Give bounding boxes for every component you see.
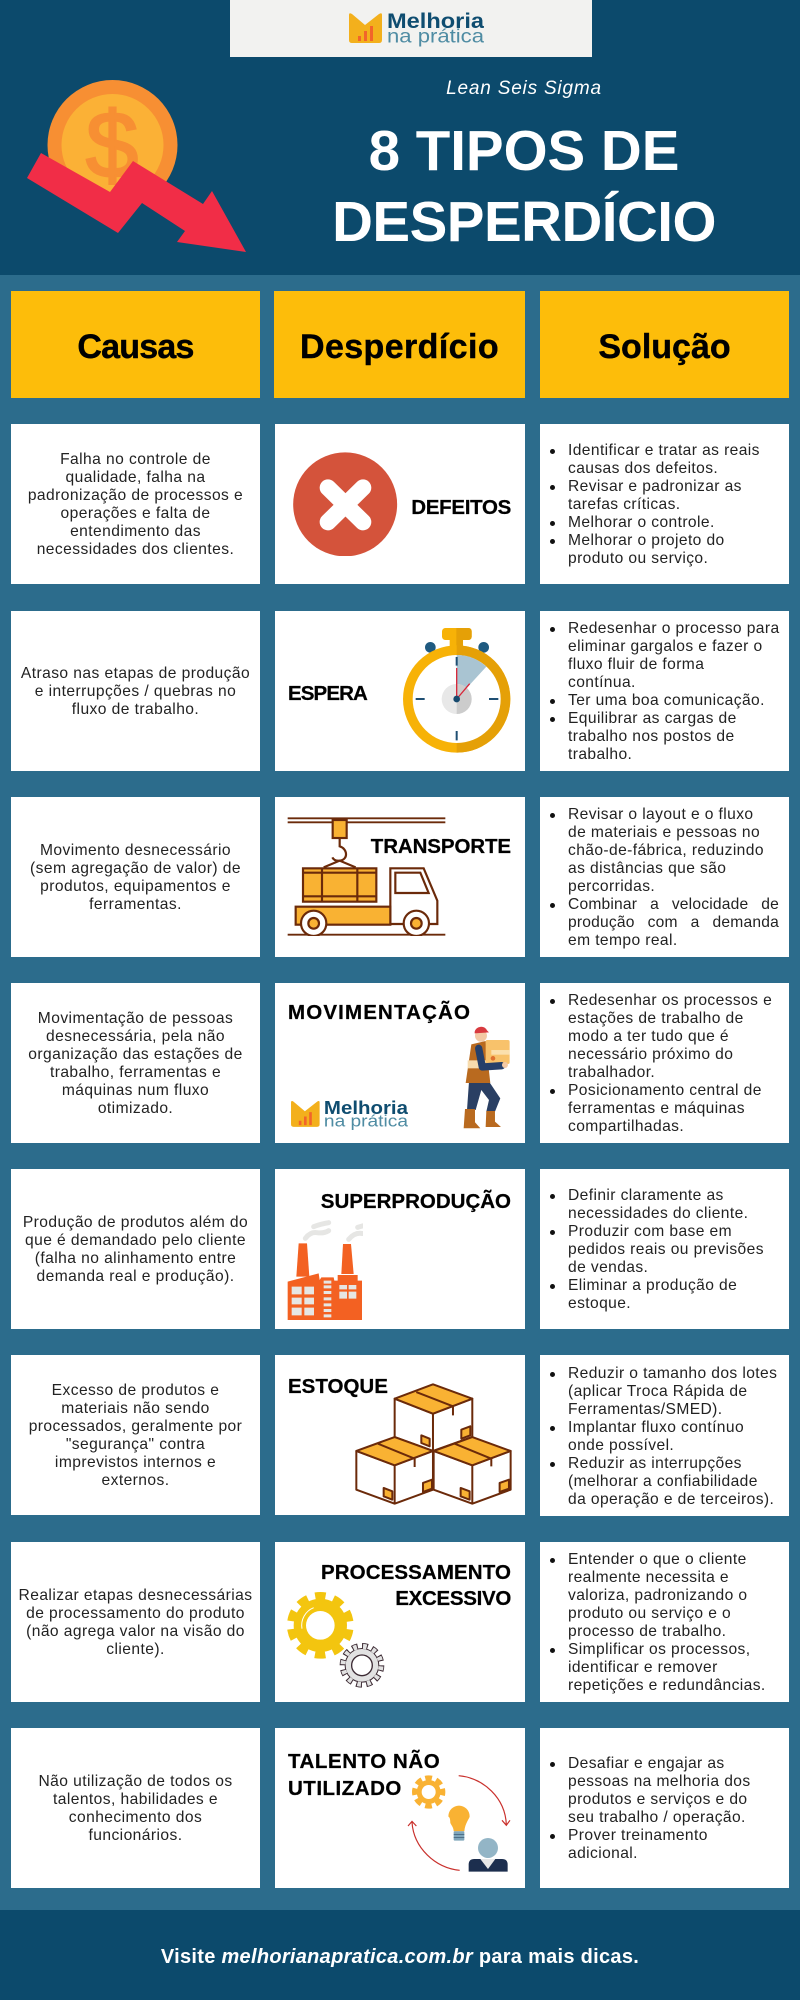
icon: factory xyxy=(288,1220,363,1320)
title: DESPERDÍCIO xyxy=(332,190,716,253)
solution 8: pessoas na melhoria dos xyxy=(568,1773,751,1790)
logo xyxy=(349,12,484,48)
cause 8: conhecimento dos xyxy=(69,1809,202,1826)
label: superprodução: SUPERPRODUÇÃO xyxy=(321,1190,511,1213)
cause 3: (sem agregação de valor) de xyxy=(30,860,241,877)
solution 2: Equilibrar as cargas de xyxy=(568,710,737,727)
solution 8: produtos e serviços e do xyxy=(568,1791,748,1808)
solution 3: percorridas. xyxy=(568,878,655,895)
solution 3: Combinar a velocidade de xyxy=(568,896,779,913)
cause 4 xyxy=(11,983,260,1143)
panel: transporte xyxy=(275,797,525,957)
cause 6 xyxy=(11,1355,260,1515)
cause 2: e interrupções / quebras no xyxy=(35,683,236,700)
cause 2 xyxy=(11,611,260,771)
solution 4: Posicionamento central de xyxy=(568,1082,762,1099)
cause 1: padronização de processos e xyxy=(28,487,243,504)
cause 7 xyxy=(11,1542,260,1702)
panel: defeitos xyxy=(275,424,525,584)
cause 4: desnecessária, pela não xyxy=(46,1028,225,1045)
solution 6: Reduzir o tamanho dos lotes xyxy=(568,1364,777,1382)
cause 8: funcionários. xyxy=(88,1827,182,1844)
solution 8: seu trabalho / operação. xyxy=(568,1809,746,1826)
cause 6: Excesso de produtos e xyxy=(52,1382,219,1399)
solution 7: produto ou serviço e o xyxy=(568,1605,731,1622)
logo xyxy=(291,1100,408,1130)
cause 6: imprevistos internos e xyxy=(55,1454,216,1471)
solution 2: trabalho. xyxy=(568,746,632,763)
solution 7 xyxy=(540,1542,789,1702)
label: estoque: ESTOQUE xyxy=(288,1375,388,1398)
panel: espera xyxy=(275,611,525,771)
solution 5: de vendas. xyxy=(568,1259,648,1276)
solution 4: Redesenhar os processos e xyxy=(568,992,772,1009)
icon: stacked boxes xyxy=(355,1383,512,1505)
solution 3 xyxy=(540,797,789,957)
solution 7: Simplificar os processos, xyxy=(568,1641,750,1658)
solution 4: estações de trabalho de xyxy=(568,1010,744,1027)
solution 2: fluxo fluir de forma xyxy=(568,656,704,673)
solution 8: Desafiar e engajar as xyxy=(568,1755,725,1772)
solution 2: Ter uma boa comunicação. xyxy=(568,692,765,709)
icon: stopwatch xyxy=(403,628,510,753)
cause 7: de processamento do produto xyxy=(26,1605,245,1622)
cause 1: Falha no controle de xyxy=(60,451,211,468)
solution 3: produção com a demanda xyxy=(568,914,779,931)
cause 1: necessidades dos clientes. xyxy=(37,541,234,558)
column heading: causas: Causas xyxy=(77,328,194,366)
solution 7: processo de trabalho. xyxy=(568,1623,726,1640)
cause 2: Atraso nas etapas de produção xyxy=(21,665,250,682)
label: movimentação: MOVIMENTAÇÃO xyxy=(288,1001,471,1024)
icon: worker carrying box xyxy=(464,1026,510,1128)
logo: na prática xyxy=(324,1111,408,1130)
solution 1: Melhorar o controle. xyxy=(568,514,715,531)
label: processamento excessivo xyxy=(321,1561,511,1610)
cause 4: trabalho, ferramentas e xyxy=(50,1064,221,1081)
cause 6: processados, geralmente por xyxy=(29,1418,242,1435)
solution 5: Definir claramente as xyxy=(568,1187,724,1204)
cause 8: talentos, habilidades e xyxy=(53,1791,218,1808)
cause 7: (não agrega valor na visão do xyxy=(26,1623,245,1640)
label: defeitos: DEFEITOS xyxy=(411,496,511,519)
footer text: Visite melhorianapratica.com.br para mais dicas. xyxy=(161,1946,639,1968)
cause 8: Não utilização de todos os xyxy=(38,1773,233,1790)
subtitle: Lean Seis Sigma xyxy=(446,78,602,99)
solution 2: trabalho nos postos de xyxy=(568,728,735,745)
panel: superprodução xyxy=(275,1169,525,1329)
solution 5: estoque. xyxy=(568,1295,631,1312)
solution 7: repetições e redundâncias. xyxy=(568,1677,766,1694)
cause 6: materiais não sendo xyxy=(61,1400,210,1417)
solution 6: Reduzir as interrupções xyxy=(568,1454,742,1472)
solution 1: Identificar e tratar as reais xyxy=(568,442,760,459)
cause 1: entendimento das xyxy=(70,523,201,540)
solution 4: necessário próximo do xyxy=(568,1046,733,1063)
cause 2: fluxo de trabalho. xyxy=(72,701,199,718)
label: espera: ESPERA xyxy=(288,682,367,705)
cause 5 xyxy=(11,1169,260,1329)
panel: processamento excessivo xyxy=(275,1542,525,1702)
footer band xyxy=(0,1910,800,2000)
solution 3: de materiais e pessoas no xyxy=(568,824,760,841)
column heading: solução xyxy=(540,291,789,398)
arrow down xyxy=(27,153,246,252)
solution 6: onde possível. xyxy=(568,1436,674,1454)
cause 3: ferramentas. xyxy=(89,896,182,913)
cause 5: que é demandado pelo cliente xyxy=(25,1232,246,1249)
solution 1 xyxy=(540,424,789,584)
label: talento não utilizado: TALENTO NÃO xyxy=(288,1750,440,1773)
label: processamento excessivo: EXCESSIVO xyxy=(395,1587,511,1610)
solution 2 xyxy=(540,611,789,771)
solution 4: modo a ter tudo que é xyxy=(568,1028,729,1045)
column heading: solução: Solução xyxy=(598,328,731,366)
cause 7: cliente). xyxy=(106,1641,165,1658)
label: processamento excessivo: PROCESSAMENTO xyxy=(321,1561,511,1584)
solution 8: Prover treinamento xyxy=(568,1827,708,1844)
cause 5: demanda real e produção). xyxy=(36,1268,234,1285)
solution 8 xyxy=(540,1728,789,1888)
cause 5: (falha no alinhamento entre xyxy=(35,1250,236,1267)
coin icon xyxy=(48,80,178,197)
solution 1: causas dos defeitos. xyxy=(568,460,718,477)
title xyxy=(332,119,716,253)
icon: x circle xyxy=(293,452,398,556)
solution 7: valoriza, padronizando o xyxy=(568,1587,748,1604)
solution 7: Entender o que o cliente xyxy=(568,1551,747,1568)
cause 3: produtos, equipamentos e xyxy=(40,878,231,895)
cause 6: externos. xyxy=(101,1472,170,1489)
cause 6: "segurança" contra xyxy=(66,1436,205,1453)
solution 5: pedidos reais ou previsões xyxy=(568,1241,764,1258)
icon: truck and crane xyxy=(288,817,446,936)
solution 1: produto ou serviço. xyxy=(568,550,708,567)
solution 3: Revisar o layout e o fluxo xyxy=(568,806,754,823)
solution 6: da operação e de terceiros). xyxy=(568,1490,774,1508)
solution 3: em tempo real. xyxy=(568,932,678,949)
solution 2: eliminar gargalos e fazer o xyxy=(568,638,763,655)
solution 5: Eliminar a produção de xyxy=(568,1277,737,1294)
solution 7: realmente necessita e xyxy=(568,1569,729,1586)
solution 3: as distâncias que são xyxy=(568,860,726,877)
icon: talent cycle xyxy=(408,1775,510,1872)
cause 5: Produção de produtos além do xyxy=(23,1214,248,1231)
cause 4: organização das estações de xyxy=(28,1046,243,1063)
column heading: causas xyxy=(11,291,260,398)
logo: na prática xyxy=(387,26,484,48)
solution 4: ferramentas e máquinas xyxy=(568,1100,745,1117)
cause 4: máquinas num fluxo xyxy=(62,1082,209,1099)
cause 1: operações e falta de xyxy=(61,505,210,522)
solution 6: Ferramentas/SMED). xyxy=(568,1400,723,1418)
solution 1: Revisar e padronizar as xyxy=(568,478,742,495)
solution 6 xyxy=(540,1355,789,1516)
cause 1: qualidade, falha na xyxy=(66,469,205,486)
coin icon: $ xyxy=(86,92,138,197)
column heading: desperdício xyxy=(274,291,525,398)
label: talento não utilizado xyxy=(288,1750,440,1800)
solution 6: (aplicar Troca Rápida de xyxy=(568,1382,748,1400)
cause 3 xyxy=(11,797,260,957)
cause 3: Movimento desnecessário xyxy=(40,842,231,859)
cause 8 xyxy=(11,1728,260,1888)
solution 5: necessidades do cliente. xyxy=(568,1205,748,1222)
icon: gears xyxy=(287,1592,384,1688)
solution 6: (melhorar a confiabilidade xyxy=(568,1472,758,1490)
label: talento não utilizado: UTILIZADO xyxy=(288,1777,402,1800)
solution 3: chão-de-fábrica, reduzindo xyxy=(568,842,764,859)
solution 5 xyxy=(540,1169,789,1329)
solution 4: compartilhadas. xyxy=(568,1118,684,1135)
label: transporte: TRANSPORTE xyxy=(371,835,511,858)
header band xyxy=(0,0,800,275)
solution 1: tarefas críticas. xyxy=(568,496,681,513)
solution 2: Redesenhar o processo para xyxy=(568,620,780,637)
solution 7: identificar e remover xyxy=(568,1659,718,1676)
solution 8: adicional. xyxy=(568,1845,638,1862)
solution 5: Produzir com base em xyxy=(568,1223,732,1240)
cause 4: Movimentação de pessoas xyxy=(38,1010,233,1027)
solution 4: trabalhador. xyxy=(568,1064,655,1081)
column heading: desperdício: Desperdício xyxy=(300,328,499,366)
solution 4 xyxy=(540,983,789,1143)
solution 2: contínua. xyxy=(568,674,636,691)
cause 7: Realizar etapas desnecessárias xyxy=(19,1587,252,1604)
solution 6: Implantar fluxo contínuo xyxy=(568,1418,744,1436)
cause 4: otimizado. xyxy=(98,1100,173,1117)
cause 1 xyxy=(11,424,260,584)
title: 8 TIPOS DE xyxy=(369,119,679,182)
logo panel xyxy=(230,0,592,57)
panel: estoque xyxy=(275,1355,525,1515)
panel: movimentação xyxy=(275,983,525,1143)
solution 1: Melhorar o projeto do xyxy=(568,532,725,549)
panel: talento não utilizado xyxy=(275,1728,525,1888)
